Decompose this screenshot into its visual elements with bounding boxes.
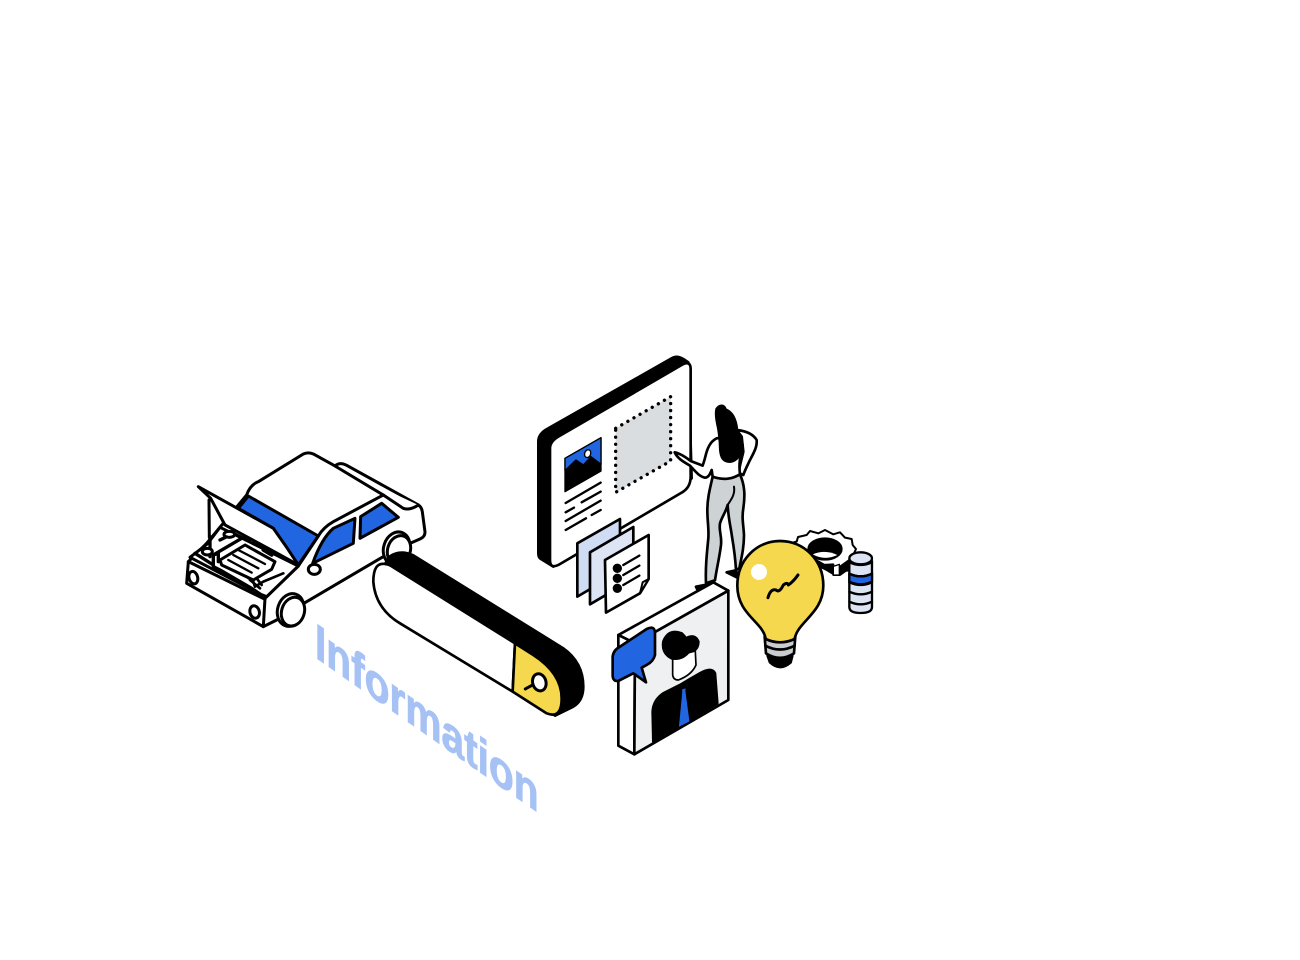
person portrait: [653, 632, 717, 742]
figure: woman pointing at screen: [675, 406, 757, 592]
icon: car with open hood: [187, 453, 425, 630]
search bar input field: [373, 564, 515, 692]
bulb glass: [737, 541, 823, 642]
image placeholder: [565, 438, 601, 492]
speech bubble: [613, 628, 655, 682]
search bar yellow button: [513, 643, 562, 715]
engine bay: [190, 527, 298, 597]
search bar: [373, 553, 583, 716]
panel: presentation screen: [538, 357, 692, 567]
icon: light bulb: [737, 541, 823, 667]
legs: [727, 570, 739, 578]
search bar black depth: [385, 553, 583, 716]
text lines: [566, 483, 601, 530]
bulb base: [768, 656, 792, 667]
document with checklist: [605, 535, 649, 613]
panel: portrait card: [613, 582, 728, 754]
hood: [198, 487, 298, 565]
icon: gear: [792, 530, 856, 575]
wheels: [273, 590, 308, 630]
dotted selection: [616, 397, 671, 492]
icon: database cylinder: [849, 552, 872, 613]
documents: [577, 519, 649, 613]
hair: [716, 406, 743, 462]
icon: magnifier: [525, 672, 548, 692]
heading: Information: Information: [315, 612, 539, 824]
torso and arms: [737, 430, 757, 475]
